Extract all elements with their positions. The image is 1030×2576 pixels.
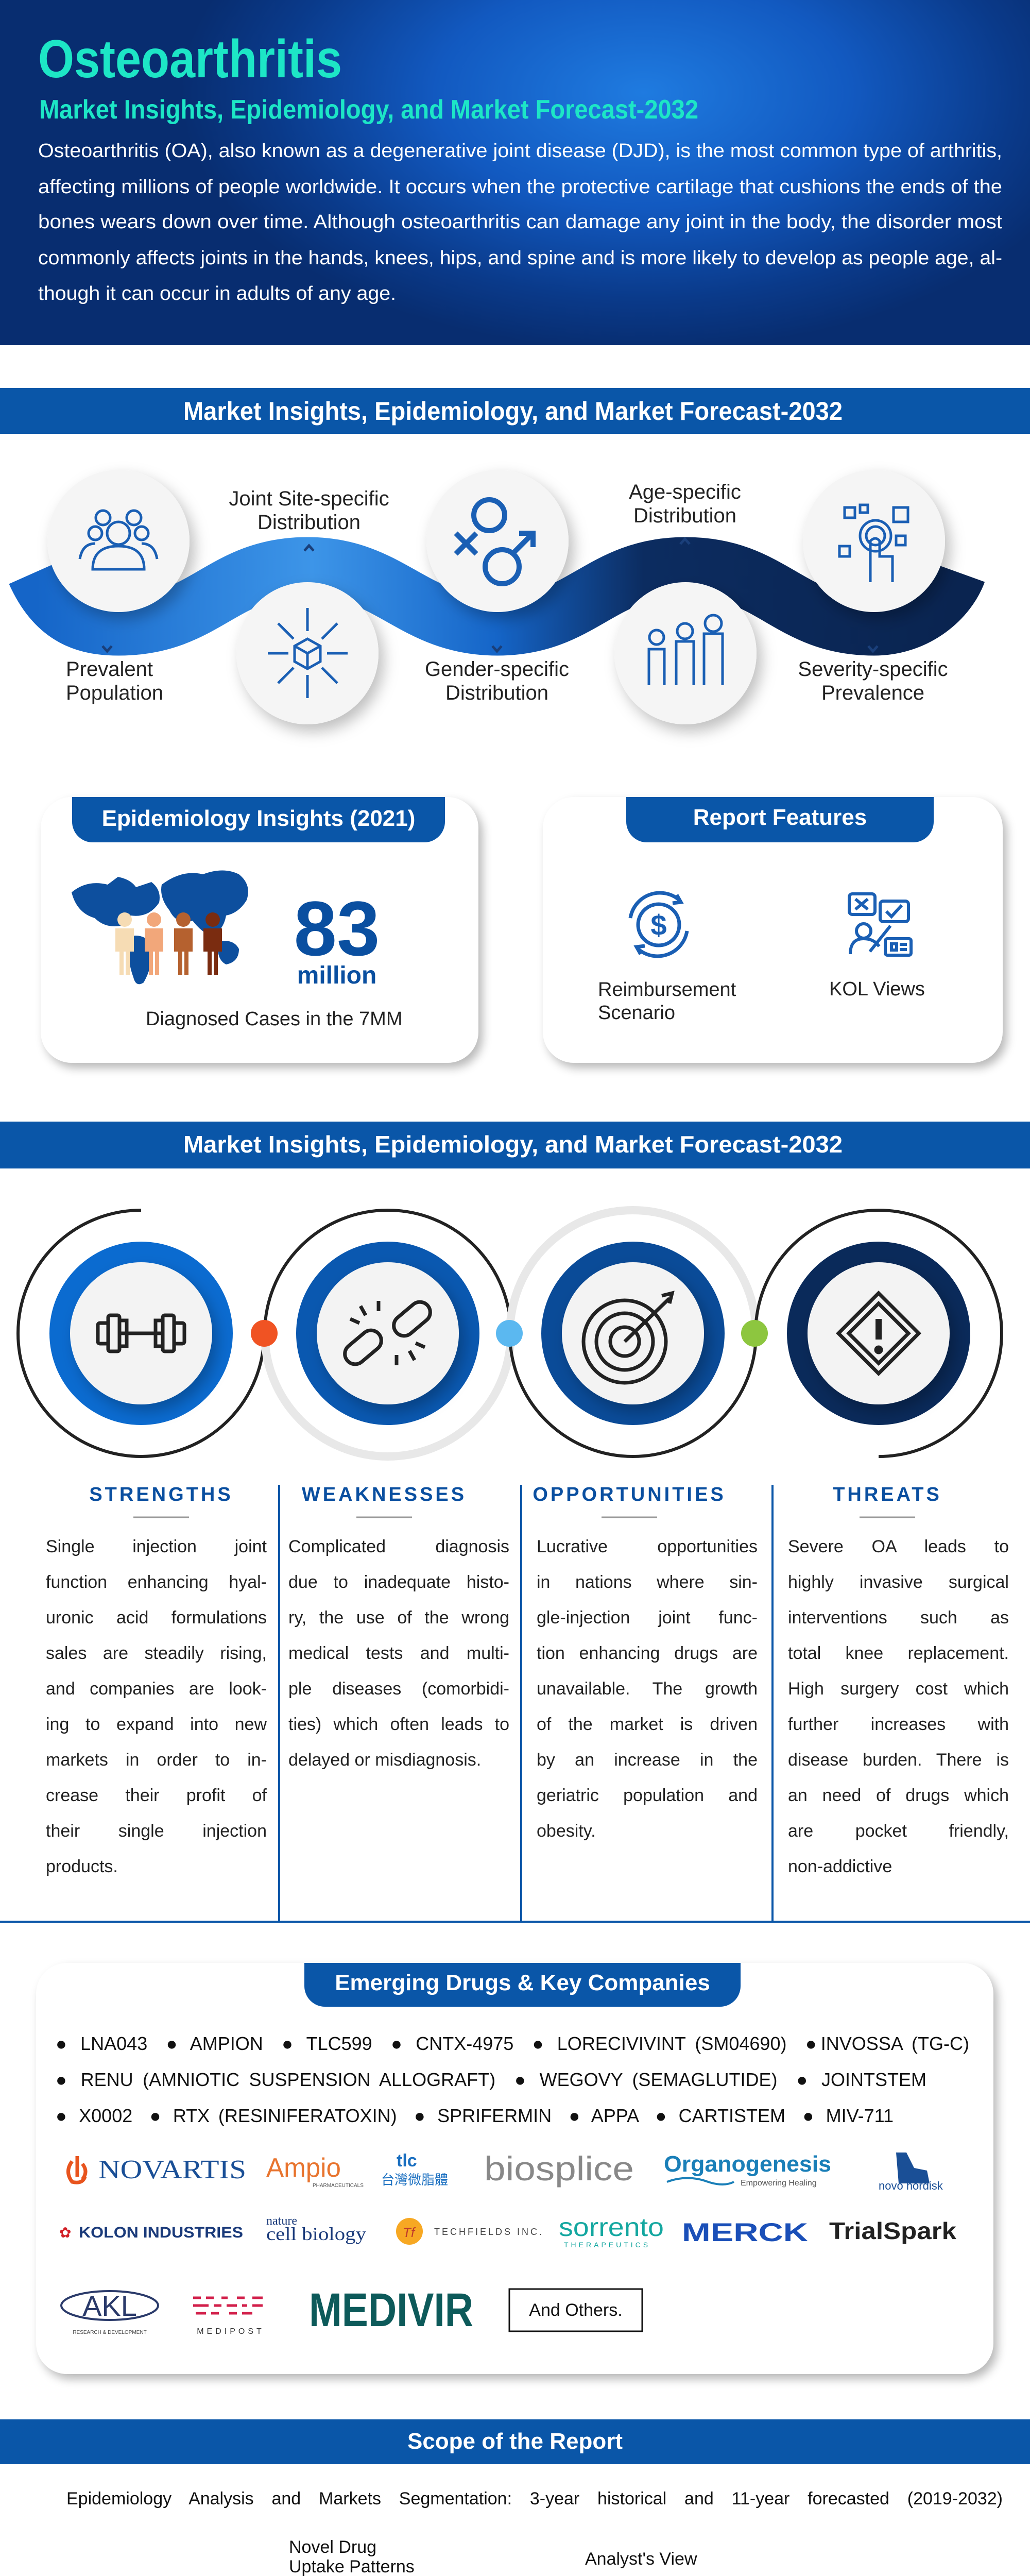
column: opportunities text: by an increase in the	[537, 1750, 758, 1770]
company logos: Ampio	[266, 2153, 341, 2183]
label: severity-specific prevalence: Prevalence	[821, 682, 924, 704]
column: threats text: non-addictive	[788, 1857, 892, 1876]
label: joint site-specific distribution	[229, 487, 389, 551]
tab heading	[304, 1963, 741, 2007]
connector dots	[251, 1320, 768, 1347]
section bar: market insights 1	[0, 388, 1030, 434]
title: Osteoarthritis	[38, 29, 342, 89]
intro paragraph: bones wears down over time. Although osteoarthritis can damage any joint in the body, the disorder most	[38, 211, 1002, 233]
column: opportunities text	[537, 1537, 758, 1841]
column: opportunities text: geriatric population and	[537, 1786, 758, 1805]
column: opportunities text: tion enhancing drugs are	[537, 1643, 758, 1663]
column: weaknesses text: due to inadequate histo-	[288, 1572, 509, 1592]
company logos: MERCK	[682, 2218, 808, 2247]
column: weaknesses text: medical tests and multi-	[288, 1643, 509, 1663]
caption: Diagnosed Cases in the 7MM	[146, 1008, 402, 1030]
column: weaknesses text: ties) which often leads to	[288, 1715, 509, 1734]
column: strengths text: products.	[46, 1857, 118, 1876]
intro paragraph: affecting millions of people worldwide. It occurs when the protective cartilage that cushions the ends of the	[38, 176, 1002, 198]
company logos: sorrento	[559, 2213, 664, 2242]
column: strengths text: sales are steadily rising,	[46, 1643, 267, 1663]
company logos: 台灣微脂體	[381, 2172, 448, 2188]
column: strengths text: crease their profit of	[46, 1786, 267, 1805]
column: weaknesses text	[288, 1537, 509, 1770]
column: opportunities text: of the market is driven	[537, 1715, 758, 1734]
icon: world map with people	[72, 871, 248, 984]
label: gender-specific distribution: Gender-specific	[425, 658, 569, 681]
icon: reimbursement: $	[650, 909, 667, 941]
label: reimbursement scenario: Scenario	[598, 1002, 675, 1024]
company logos: RESEARCH & DEVELOPMENT	[73, 2330, 147, 2335]
icon: reimbursement	[628, 891, 689, 958]
column: threats text: total knee replacement.	[788, 1643, 1009, 1663]
intro paragraph: Osteoarthritis (OA), also known as a degenerative joint disease (DJD), is the most common type of arthritis,	[38, 140, 1002, 162]
label: gender-specific distribution	[425, 645, 569, 704]
band	[36, 567, 957, 626]
label: prevalent population	[66, 645, 163, 704]
label: age-specific distribution: Age-specific	[629, 481, 741, 503]
section bar: market insights 1: Market Insights, Epidemiology, and Market Forecast-2032	[183, 397, 843, 426]
company logos: NOVARTIS	[98, 2155, 246, 2184]
label: novel drug uptake patterns	[289, 2537, 415, 2576]
intro paragraph	[38, 140, 1002, 304]
drug list: ● LNA043 ● AMPION ● TLC599 ● CNTX-4975 ● LORECIVIVINT (SM04690) ●INVOSSA (TG-C)	[56, 2033, 969, 2054]
SWOT dividers	[89, 1484, 942, 1921]
label: reimbursement scenario	[598, 979, 736, 1024]
company logos: biosplice	[484, 2149, 634, 2188]
label: analyst's view: Analyst's View	[585, 2549, 697, 2569]
section bar: scope of the report: Scope of the Report	[407, 2429, 623, 2454]
label: age-specific distribution	[629, 481, 741, 545]
company logos: Tf	[403, 2225, 416, 2240]
drug list: ● RENU (AMNIOTIC SUSPENSION ALLOGRAFT) ● WEGOVY (SEMAGLUTIDE) ● JOINTSTEM	[56, 2069, 926, 2090]
column: opportunities text: in nations where sin-	[537, 1572, 758, 1592]
heading: strengths: STRENGTHS	[89, 1484, 233, 1505]
column: weaknesses text: ry, the use of the wrong	[288, 1608, 509, 1628]
label: reimbursement scenario: Reimbursement	[598, 979, 736, 1001]
column: threats text: an need of drugs which	[788, 1786, 1009, 1805]
label: prevalent population: Prevalent	[66, 658, 153, 681]
tab heading	[72, 797, 445, 842]
company logos: AKL	[82, 2290, 137, 2322]
circle: age	[614, 582, 757, 724]
company logos: tlc	[397, 2151, 417, 2171]
company logos	[59, 2149, 956, 2336]
column: threats text: highly invasive surgical	[788, 1572, 1009, 1592]
header banner	[0, 0, 1030, 345]
stat: 83 million: million	[297, 962, 376, 989]
label: joint site-specific distribution: Distribution	[258, 511, 360, 534]
label: novel drug uptake patterns: Novel Drug	[289, 2537, 376, 2557]
label: KOL views: KOL Views	[829, 978, 925, 1000]
label: joint site-specific distribution: Joint Site-specific	[229, 487, 389, 510]
panel: emerging drugs & key companies	[36, 1963, 993, 2374]
drug list	[56, 2033, 969, 2126]
column: weaknesses text: ple diseases (comorbidi-	[288, 1679, 509, 1699]
section bar: market insights 2	[0, 1122, 1030, 1168]
company logos: Organogenesis	[664, 2151, 831, 2177]
intro paragraph: though it can occur in adults of any age.	[38, 283, 396, 304]
column: opportunities text: gle-injection joint func-	[537, 1608, 758, 1628]
company logos: KOLON INDUSTRIES	[79, 2224, 243, 2241]
tab heading	[626, 797, 934, 842]
column: strengths text: and companies are look-	[46, 1679, 267, 1699]
SWOT circles	[16, 1206, 1003, 1461]
column: threats text	[788, 1537, 1009, 1876]
section bar: market insights 2: Market Insights, Epidemiology, and Market Forecast-2032	[183, 1131, 843, 1158]
panel: epidemiology insights	[41, 797, 478, 1063]
company logos: PHARMACEUTICALS	[313, 2183, 364, 2189]
column: threats text: Severe OA leads to	[788, 1537, 1009, 1556]
circle: joint site	[236, 582, 379, 724]
circle: prevalent population	[47, 470, 190, 612]
scope hexagon diagram	[0, 2524, 1030, 2576]
circle: strengths icon	[49, 1242, 233, 1425]
column: threats text: High surgery cost which	[788, 1679, 1009, 1699]
column: weaknesses text: delayed or misdiagnosis.	[288, 1750, 481, 1770]
column: strengths text: their single injection	[46, 1821, 267, 1841]
tab heading: Epidemiology Insights (2021)	[102, 806, 415, 831]
wavy distribution diagram	[9, 470, 985, 739]
column: opportunities text: unavailable. The growth	[537, 1679, 758, 1699]
label: age-specific distribution: Distribution	[633, 504, 736, 527]
company logos: Empowering Healing	[741, 2179, 817, 2188]
scope subtitle: Epidemiology Analysis and Markets Segmentation: 3-year historical and 11-year forecasted (2019-2032)	[66, 2489, 1003, 2509]
heading: weaknesses: WEAKNESSES	[302, 1484, 467, 1505]
circle: severity	[803, 470, 945, 612]
heading: opportunities: OPPORTUNITIES	[533, 1484, 726, 1505]
stat: 83 million: 83	[294, 885, 380, 972]
column: threats text: interventions such as	[788, 1608, 1009, 1628]
intro paragraph: commonly affects joints in the hands, knees, hips, and spine and is more likely to develop as people age, al-	[38, 247, 1002, 269]
label: gender-specific distribution: Distribution	[445, 682, 548, 704]
section bar: scope of the report	[0, 2419, 1030, 2464]
label: novel drug uptake patterns: Uptake Patterns	[289, 2557, 415, 2576]
panel: report features	[543, 797, 1003, 1063]
column: strengths text: function enhancing hyal-	[46, 1572, 267, 1592]
circle: weaknesses icon	[296, 1242, 479, 1425]
company logos: THERAPEUTICS	[564, 2241, 650, 2249]
company logos: novo nordisk	[879, 2179, 943, 2192]
label: prevalent population: Population	[66, 682, 163, 704]
icon: KOL views	[848, 892, 913, 957]
subtitle: Market Insights, Epidemiology, and Market Forecast-2032	[39, 95, 698, 125]
company logos: MEDIPOST	[197, 2327, 265, 2336]
circle: threats icon	[787, 1242, 970, 1425]
circle: gender	[426, 470, 569, 612]
circle: opportunities icon	[541, 1242, 725, 1425]
column: threats text: disease burden. There is	[788, 1750, 1009, 1770]
column: opportunities text: obesity.	[537, 1821, 596, 1841]
drug list: ● X0002 ● RTX (RESINIFERATOXIN) ● SPRIFERMIN ● APPA ● CARTISTEM ● MIV-711	[56, 2105, 894, 2126]
column: strengths text: uronic acid formulations	[46, 1608, 267, 1628]
company logos: TECHFIELDS INC.	[434, 2227, 544, 2237]
company logos: ✿	[59, 2225, 71, 2241]
column: strengths text: markets in order to in-	[46, 1750, 267, 1770]
company logos: And Others.	[529, 2300, 623, 2320]
column: weaknesses text: Complicated diagnosis	[288, 1537, 509, 1556]
company logos: nature	[266, 2214, 297, 2228]
column: opportunities text: Lucrative opportunities	[537, 1537, 758, 1556]
column: strengths text: Single injection joint	[46, 1537, 267, 1556]
label: severity-specific prevalence	[798, 645, 948, 704]
company logos: TrialSpark	[829, 2217, 956, 2244]
column: threats text: further increases with	[788, 1715, 1009, 1734]
company logos: cell biology	[266, 2224, 366, 2244]
tab heading: Report Features	[693, 805, 867, 830]
column: strengths text: ing to expand into new	[46, 1715, 267, 1734]
column: strengths text	[46, 1537, 267, 1876]
label: severity-specific prevalence: Severity-specific	[798, 658, 948, 681]
column: threats text: are pocket friendly,	[788, 1821, 1009, 1841]
heading: threats: THREATS	[833, 1484, 942, 1505]
company logos: MEDIVIR	[309, 2284, 473, 2336]
tab heading: Emerging Drugs & Key Companies	[335, 1970, 710, 1995]
